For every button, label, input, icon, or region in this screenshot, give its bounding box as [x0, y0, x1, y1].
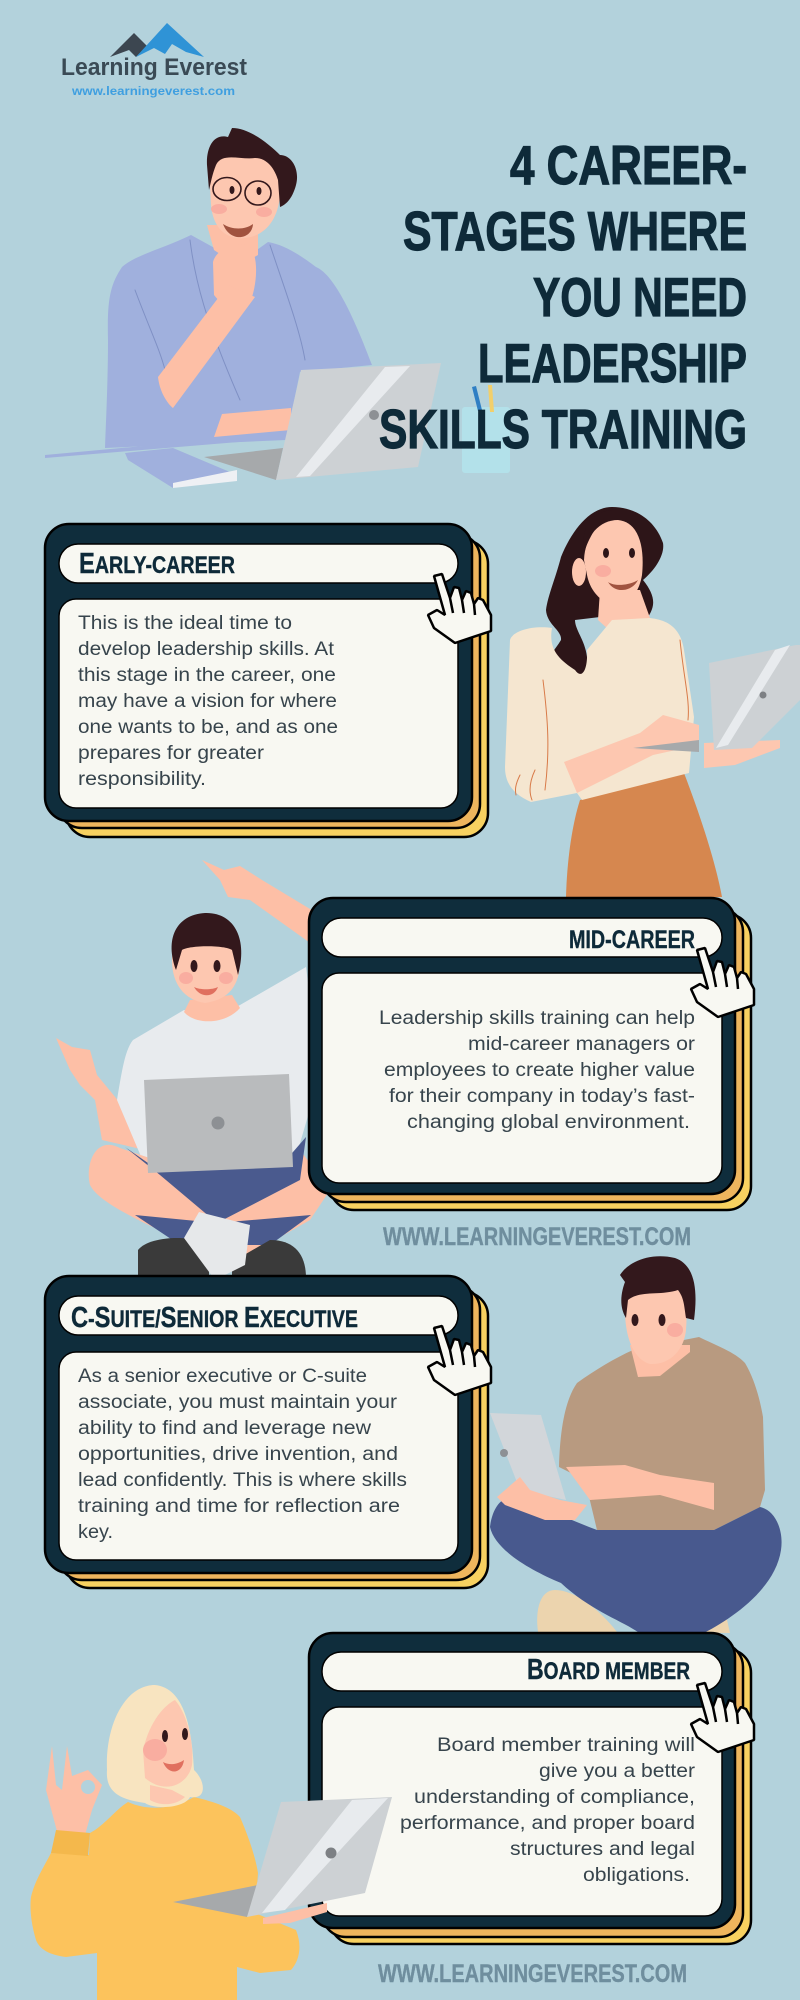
- text block: c-suite: training and time for reflection are: [78, 1496, 400, 1517]
- text block: c-suite: associate, you must maintain your: [78, 1392, 398, 1413]
- text block: c-suite: opportunities, drive invention, and: [78, 1444, 398, 1465]
- icon: hand cursor: [691, 1683, 754, 1752]
- text block: board member: [400, 1735, 696, 1886]
- text block: early-career: This is the ideal time to: [78, 613, 292, 634]
- text block: early-career: prepares for greater: [78, 743, 265, 764]
- text block: early-career: one wants to be, and as one: [78, 717, 338, 738]
- icon: hand cursor: [428, 1326, 491, 1395]
- icon: hand cursor: [428, 574, 491, 643]
- text block: board member: performance, and proper board: [400, 1813, 695, 1834]
- website link: WWW.LEARNINGEVEREST.COM: [378, 1960, 687, 1988]
- text block: mid-career: Leadership skills training can help: [379, 1008, 695, 1029]
- illustration: man cross-legged with tablet: [490, 1256, 782, 1635]
- text block: board member: structures and legal: [510, 1839, 695, 1860]
- text block: c-suite: key.: [78, 1522, 113, 1543]
- logo: Learning Everest: www.learningeverest.com: [71, 84, 235, 98]
- text block: mid-career: for their company in today’s fast-: [389, 1086, 695, 1107]
- text block: c-suite: [78, 1366, 407, 1543]
- logo: Learning Everest: Learning Everest: [61, 54, 247, 81]
- illustration: man thinking at laptop: [45, 128, 510, 488]
- text block: early-career: may have a vision for where: [78, 691, 337, 712]
- text block: board member: Board member training will: [437, 1735, 695, 1756]
- heading: early-career: EARLY-CAREER: [79, 548, 235, 580]
- text block: early-career: [78, 613, 338, 790]
- heading: c-suite: C-SUITE/SENIOR EXECUTIVE: [71, 1302, 358, 1334]
- heading: board member: BOARD MEMBER: [527, 1654, 690, 1686]
- text block: early-career: responsibility.: [78, 769, 206, 790]
- panel: c-suite: [45, 1276, 491, 1588]
- illustration: blonde woman with laptop: [31, 1685, 392, 2000]
- text block: early-career: develop leadership skills. At: [78, 639, 335, 660]
- text block: mid-career: mid-career managers or: [468, 1034, 696, 1055]
- heading: mid-career: MID-CAREER: [569, 926, 695, 954]
- illustration: woman with laptop: [505, 507, 800, 897]
- illustration: man sitting with laptop: [56, 860, 330, 1280]
- icon: hand cursor: [691, 948, 754, 1017]
- title: 4 CAREER-: [510, 134, 747, 196]
- title: [379, 134, 747, 460]
- panel: board member: [309, 1633, 754, 1944]
- website link: WWW.LEARNINGEVEREST.COM: [383, 1223, 691, 1251]
- text block: c-suite: lead confidently. This is where skills: [78, 1470, 407, 1491]
- text block: mid-career: changing global environment.: [407, 1112, 690, 1133]
- panel: mid-career: [309, 898, 754, 1210]
- text block: board member: understanding of compliance,: [414, 1787, 695, 1808]
- logo: Learning Everest: [61, 23, 247, 98]
- text block: early-career: this stage in the career, one: [78, 665, 336, 686]
- text block: board member: give you a better: [539, 1761, 696, 1782]
- text block: mid-career: [379, 1008, 696, 1133]
- text block: c-suite: ability to find and leverage new: [78, 1418, 371, 1439]
- text block: mid-career: employees to create higher value: [384, 1060, 695, 1081]
- text block: board member: obligations.: [583, 1865, 690, 1886]
- panel: early-career: [45, 524, 491, 837]
- text block: c-suite: As a senior executive or C-suite: [78, 1366, 367, 1387]
